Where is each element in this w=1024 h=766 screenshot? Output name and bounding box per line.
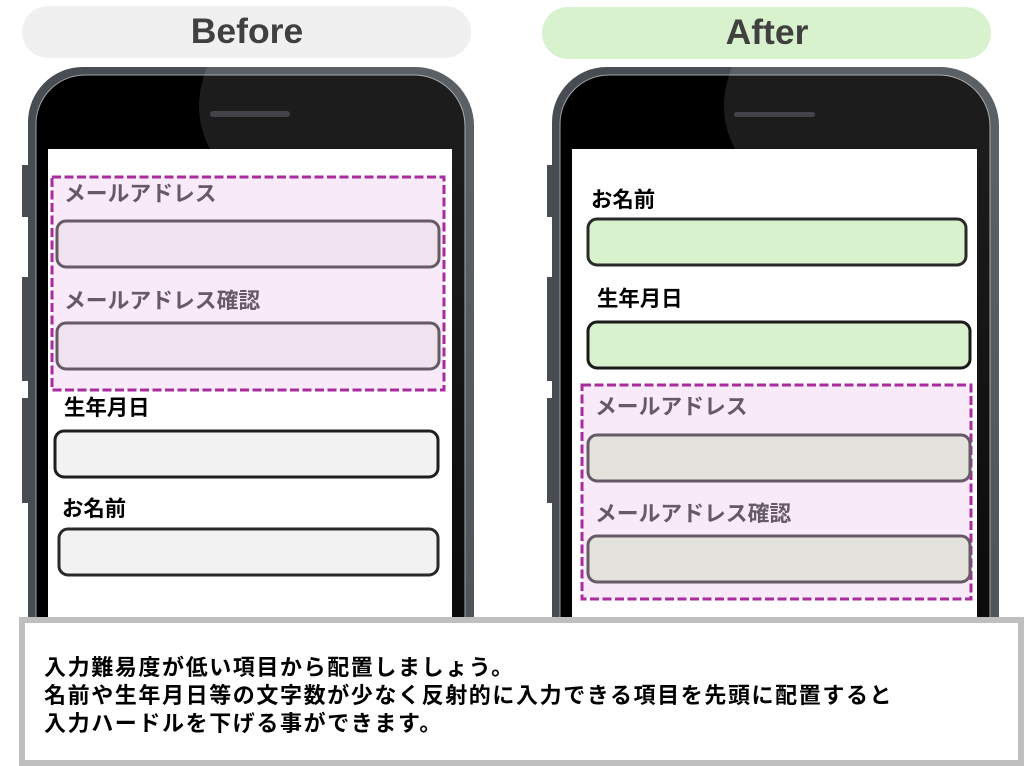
screen bbox=[572, 149, 977, 629]
highlighted email group: メールアドレス bbox=[64, 177, 217, 208]
phone body bbox=[552, 67, 999, 640]
phone side buttons bbox=[22, 165, 28, 503]
field: name bbox=[588, 183, 966, 265]
highlighted email group bbox=[52, 177, 444, 390]
callout text: 入力ハードルを下げる事ができます。 bbox=[44, 706, 443, 738]
field: birth date: 生年月日 bbox=[64, 391, 150, 422]
screen bbox=[48, 149, 452, 629]
phone glare bbox=[724, 60, 1005, 640]
callout box bbox=[22, 620, 1021, 763]
highlighted email group: メールアドレス bbox=[595, 390, 748, 421]
highlighted email group: メールアドレス確認 bbox=[64, 284, 260, 315]
field: birth date bbox=[55, 391, 438, 477]
callout text: 名前や生年月日等の文字数が少なく反射的に入力できる項目を先頭に配置すると bbox=[44, 678, 893, 710]
field: name: お名前 bbox=[591, 183, 655, 214]
field: birth date bbox=[588, 282, 970, 368]
highlighted email group bbox=[582, 385, 971, 599]
field: birth date: 生年月日 bbox=[597, 282, 683, 313]
field: name bbox=[59, 492, 438, 575]
heading pill: Before: Before bbox=[191, 11, 303, 51]
callout text: 入力難易度が低い項目から配置しましょう。 bbox=[44, 650, 515, 682]
highlighted email group: メールアドレス確認 bbox=[595, 497, 791, 528]
field: name: お名前 bbox=[62, 492, 126, 523]
heading pill: Before bbox=[22, 6, 471, 58]
phone body bbox=[28, 67, 474, 640]
phone glare bbox=[199, 60, 480, 640]
speaker bbox=[210, 111, 290, 117]
heading pill: After: After bbox=[726, 12, 809, 52]
heading pill: After bbox=[542, 7, 991, 59]
callout text bbox=[44, 650, 893, 738]
speaker bbox=[734, 112, 815, 117]
phone: before bbox=[22, 60, 480, 640]
phone side buttons bbox=[547, 165, 553, 503]
phone: after bbox=[547, 60, 1005, 640]
